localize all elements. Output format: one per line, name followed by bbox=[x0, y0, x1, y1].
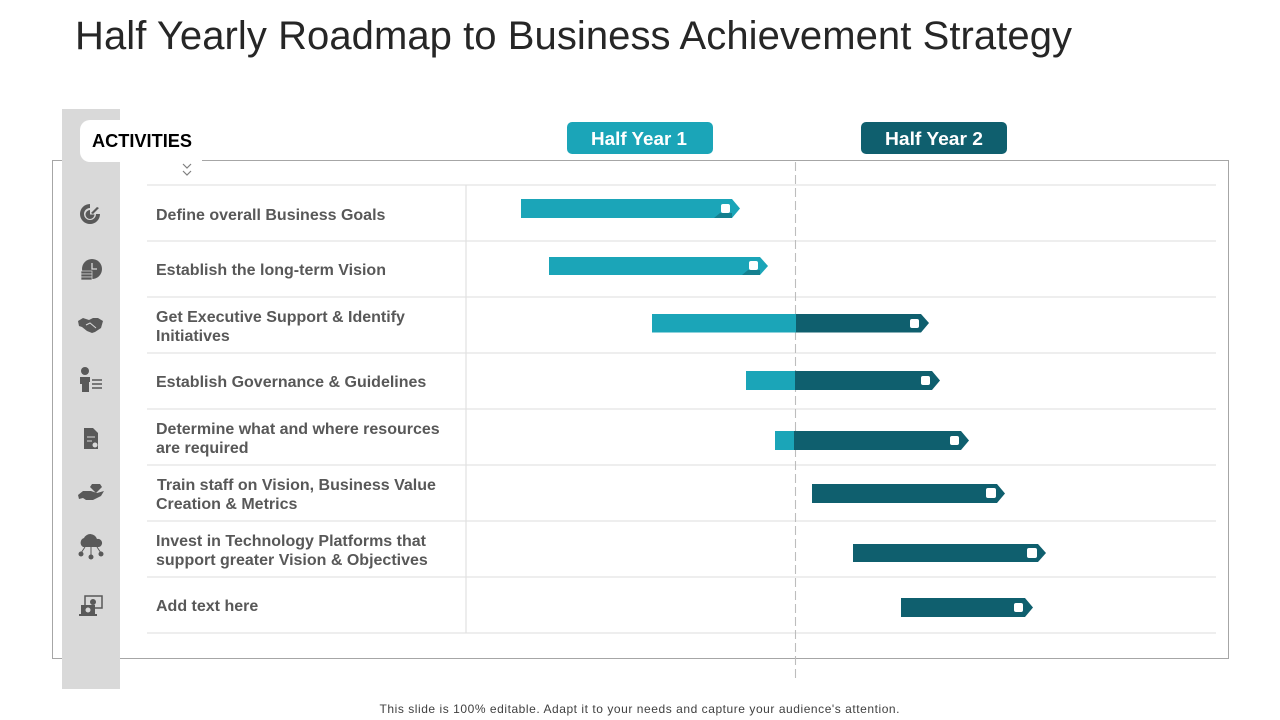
activity labels: Define overall Business Goals bbox=[156, 207, 386, 224]
half-year divider bbox=[794, 162, 796, 682]
bar: resources bbox=[775, 431, 969, 450]
panel: roadmap frame bbox=[52, 160, 1228, 658]
activities heading bbox=[80, 120, 202, 162]
icon: double chevron bbox=[183, 164, 191, 175]
footer note: This slide is 100% editable. Adapt it to your needs and capture your audience's attention. bbox=[380, 702, 900, 716]
activity labels: Invest in Technology Platforms that bbox=[156, 533, 427, 550]
activity labels bbox=[156, 207, 440, 615]
panel: icon sidebar bbox=[62, 109, 120, 689]
icon: target bbox=[80, 204, 100, 224]
activity labels: Determine what and where resources bbox=[156, 421, 440, 438]
icon: cloud network bbox=[78, 534, 104, 560]
icon: hand holding diamond bbox=[78, 484, 104, 500]
half year 1 header bbox=[567, 122, 713, 154]
icon: pie chart with coins bbox=[81, 259, 102, 280]
activity labels: support greater Vision & Objectives bbox=[156, 552, 428, 569]
bar: add text bbox=[901, 598, 1033, 617]
activity labels: Initiatives bbox=[156, 328, 230, 345]
activity labels: Train staff on Vision, Business Value bbox=[157, 477, 436, 494]
half year 2 header: Half Year 2 bbox=[885, 128, 983, 149]
activities heading: ACTIVITIES bbox=[92, 131, 192, 151]
bar: train staff bbox=[812, 484, 1005, 503]
bar: technology platforms bbox=[853, 544, 1046, 562]
activity labels: Establish Governance & Guidelines bbox=[156, 374, 426, 391]
icon: document bbox=[84, 428, 98, 449]
icon: monitors with gears bbox=[79, 596, 102, 616]
half year 2 header bbox=[861, 122, 1007, 154]
bar: long-term vision bbox=[549, 257, 768, 275]
icon: handshake bbox=[78, 318, 103, 333]
activity labels: Creation & Metrics bbox=[156, 496, 297, 513]
activity labels: Establish the long-term Vision bbox=[156, 262, 386, 279]
activity labels: are required bbox=[156, 440, 248, 457]
half year 1 header: Half Year 1 bbox=[591, 128, 687, 149]
activity labels: Add text here bbox=[156, 598, 258, 615]
bar: governance bbox=[746, 371, 940, 390]
activity labels: Get Executive Support & Identify bbox=[156, 309, 405, 326]
title: Half Yearly Roadmap to Business Achievement Strategy bbox=[75, 14, 1072, 58]
bar: define goals bbox=[521, 199, 740, 218]
icon: person with checklist bbox=[80, 367, 102, 392]
bar: executive support bbox=[652, 314, 929, 332]
